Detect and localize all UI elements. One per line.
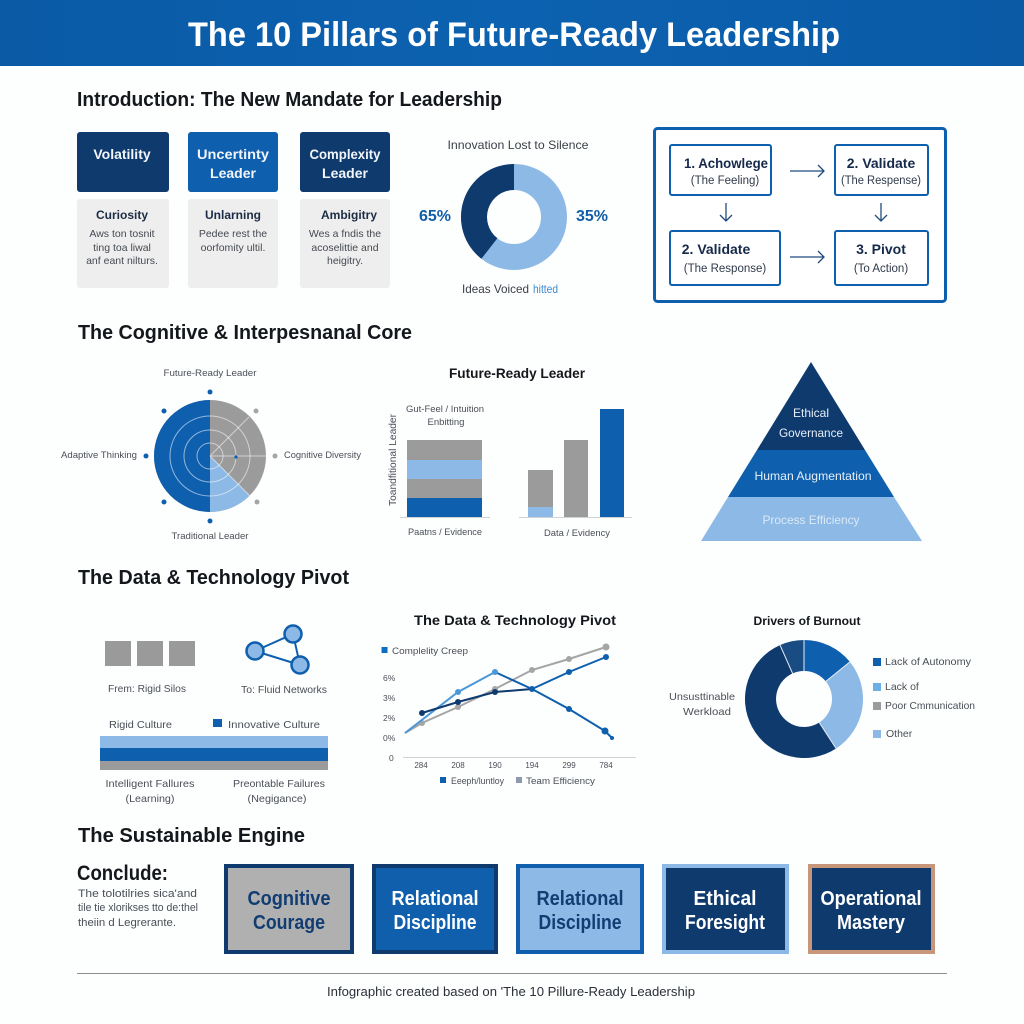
card: curiosity: anf eant nilturs. xyxy=(86,255,158,267)
chart: decision bars xyxy=(388,365,632,539)
chart: drivers of burnout donut xyxy=(669,614,975,758)
card: volatility xyxy=(77,132,169,192)
diagram: silos to networks xyxy=(105,626,327,696)
step: validate: (The Respense) xyxy=(841,175,921,187)
chart: complexity line chart: 2% xyxy=(383,713,396,723)
chart: complexity line chart: 3% xyxy=(383,693,396,703)
pillar: relational discipline light: Discipline xyxy=(538,912,622,934)
chart: drivers of burnout donut: Unsusttinable xyxy=(669,691,735,703)
chart: governance pyramid: Governance xyxy=(779,426,843,440)
card: curiosity xyxy=(77,199,169,288)
chart: complexity line chart: 190 xyxy=(488,761,502,770)
step: pivot xyxy=(835,231,928,285)
card: ambigity: Wes a fndis the xyxy=(309,228,381,240)
pillar: relational discipline xyxy=(374,866,496,952)
card: uncertainty: Leader xyxy=(210,165,257,181)
chart: complexity line chart: 284 xyxy=(414,761,428,770)
chart: radar: Future-Ready Leader xyxy=(164,368,256,379)
chart: innovation lost donut: Ideas Voiced xyxy=(462,282,529,296)
chart: radar: Cognitive Diversity xyxy=(284,450,361,461)
pillar: relational discipline light xyxy=(518,866,642,952)
chart: drivers of burnout donut: Werkload xyxy=(683,706,731,718)
chart: governance pyramid xyxy=(701,362,922,541)
heading: sustainable engine: The Sustainable Engine xyxy=(78,825,305,847)
chart: failure spectrum: Intelligent Fallures xyxy=(106,778,194,790)
chart: failure spectrum: Preontable Failures xyxy=(233,778,325,790)
chart: radar: Adaptive Thinking xyxy=(61,450,137,461)
chart: decision bars: Data / Evidency xyxy=(544,528,610,539)
series: complexity creep xyxy=(405,669,614,740)
text block: conclude xyxy=(77,862,198,929)
pillar: operational mastery: Mastery xyxy=(837,912,906,934)
card: curiosity: Curiosity xyxy=(96,208,148,222)
title banner xyxy=(0,0,1024,66)
chart: decision bars: Paatns / Evidence xyxy=(408,527,482,538)
chart: complexity line chart: 6% xyxy=(383,673,396,683)
chart: innovation lost donut xyxy=(419,138,608,296)
diagram: silos to networks: Frem: Rigid Silos xyxy=(108,683,186,695)
chart: complexity line chart: 194 xyxy=(525,761,539,770)
series: team efficiency xyxy=(405,644,610,733)
chart: decision bars: Future-Ready Leader xyxy=(449,365,586,381)
card: ambigity xyxy=(300,199,390,288)
pillar: cognitive courage: Cognitive xyxy=(248,888,330,910)
step: validate response: (The Response) xyxy=(684,263,766,275)
series: employability xyxy=(419,654,609,716)
pillar: relational discipline light: Relational xyxy=(536,888,624,910)
footer: Infographic created based on 'The 10 Pillure-Ready Leadership xyxy=(327,984,695,999)
card: unlarning: Pedee rest the xyxy=(199,228,267,240)
chart: complexity line chart: The Data & Technology Pivot xyxy=(414,612,616,628)
chart: failure spectrum xyxy=(100,719,328,805)
card: complexity: Leader xyxy=(322,165,369,181)
card: curiosity: Aws ton tosnit xyxy=(89,228,155,240)
card: complexity: Complexity xyxy=(310,146,381,162)
text block: conclude: theiin d Legrerante. xyxy=(78,917,176,929)
chart: complexity line chart: 299 xyxy=(562,761,576,770)
chart: radar: Traditional Leader xyxy=(172,531,248,542)
chart: failure spectrum: (Learning) xyxy=(126,793,174,805)
chart: failure spectrum: Innovative Culture xyxy=(228,719,320,731)
step: acknowledge xyxy=(670,145,771,195)
chart: governance pyramid: Process Efficiency xyxy=(762,513,860,527)
text block: conclude: Conclude: xyxy=(77,862,168,885)
arrows xyxy=(720,165,887,263)
card: volatility: Volatility xyxy=(93,146,151,162)
chart: drivers of burnout donut: Poor Cmmunication xyxy=(885,700,975,712)
card: ambigity: Ambigitry xyxy=(321,208,377,222)
step: validate response: 2. Validate xyxy=(682,241,750,257)
heading: data and technology pivot: The Data & Technology Pivot xyxy=(78,567,349,589)
step: acknowledge: 1. Achowlege xyxy=(684,155,768,171)
card: curiosity: ting toa liwal xyxy=(93,242,151,254)
text block: conclude: The tolotilries sica'and xyxy=(78,888,197,900)
chart: complexity line chart: Complelity Creep xyxy=(392,646,468,657)
card: ambigity: heigitry. xyxy=(327,255,363,267)
card: uncertainty: Uncertinty xyxy=(197,146,269,162)
pillar: cognitive courage: Courage xyxy=(253,912,325,934)
heading: introduction: Introduction: The New Mandate for Leadership xyxy=(77,89,502,111)
chart: failure spectrum: (Negigance) xyxy=(248,793,306,805)
chart: complexity line chart: 0 xyxy=(389,753,394,763)
pillar: operational mastery xyxy=(810,866,933,952)
pillar: relational discipline: Discipline xyxy=(394,912,476,934)
chart: complexity line chart: Eeeph/luntloy xyxy=(451,776,504,787)
card: uncertainty xyxy=(188,132,278,192)
chart: drivers of burnout donut: Drivers of Burnout xyxy=(754,614,860,628)
step: validate xyxy=(835,145,928,195)
chart: complexity line chart: 784 xyxy=(599,761,613,770)
pillar: relational discipline: Relational xyxy=(392,888,478,910)
chart: decision bars: Gut-Feel / Intuition xyxy=(406,404,484,415)
chart: innovation lost donut: hitted xyxy=(533,282,558,296)
chart: drivers of burnout donut: Lack of Autonomy xyxy=(885,656,972,668)
card: ambigity: acoselittie and xyxy=(311,242,379,254)
chart: innovation lost donut: Innovation Lost to Silence xyxy=(448,138,589,152)
icon: rigid silos xyxy=(105,641,195,666)
chart: drivers of burnout donut: Other xyxy=(886,728,913,740)
step: validate: 2. Validate xyxy=(847,155,915,171)
heading: cognitive core: The Cognitive & Interpesnanal Core xyxy=(78,322,412,344)
chart: innovation lost donut: 65% xyxy=(419,208,451,225)
step: pivot: (To Action) xyxy=(854,263,908,275)
pillar: ethical foresight: Foresight xyxy=(685,912,765,934)
card: unlarning xyxy=(188,199,278,288)
pillar: ethical foresight: Ethical xyxy=(694,888,756,910)
diagram: silos to networks: To: Fluid Networks xyxy=(241,684,327,696)
chart: governance pyramid: Ethical xyxy=(793,406,829,420)
chart: complexity line chart: 0% xyxy=(383,733,396,743)
chart: radar xyxy=(61,368,361,542)
chart: governance pyramid: Human Augmentation xyxy=(754,469,872,483)
chart: complexity line chart: 208 xyxy=(451,761,465,770)
card: unlarning: oorfomity ultil. xyxy=(201,242,265,254)
chart: drivers of burnout donut: Lack of xyxy=(885,681,919,693)
chart: complexity line chart xyxy=(382,612,636,787)
panel: feedback flow xyxy=(654,128,946,302)
pillar: ethical foresight xyxy=(664,866,787,952)
chart: complexity line chart: Team Efficiency xyxy=(526,776,595,787)
step: pivot: 3. Pivot xyxy=(856,241,906,257)
text block: conclude: tile tie xlorikses tto de:thel xyxy=(78,902,198,914)
chart: decision bars: Enbitting xyxy=(428,417,464,428)
chart: decision bars: Toandfitional Leader xyxy=(388,413,399,506)
title banner: The 10 Pillars of Future-Ready Leadership xyxy=(188,16,840,54)
chart: failure spectrum: Rigid Culture xyxy=(109,719,172,731)
step: acknowledge: (The Feeling) xyxy=(691,175,759,187)
pillar: operational mastery: Operational xyxy=(820,888,922,910)
icon: fluid network xyxy=(246,626,308,674)
panel: VUCA cards xyxy=(77,132,390,288)
step: validate response xyxy=(670,231,780,285)
card: complexity xyxy=(300,132,390,192)
pillar: cognitive courage xyxy=(226,866,352,952)
card: unlarning: Unlarning xyxy=(205,208,261,222)
chart: innovation lost donut: 35% xyxy=(576,208,608,225)
